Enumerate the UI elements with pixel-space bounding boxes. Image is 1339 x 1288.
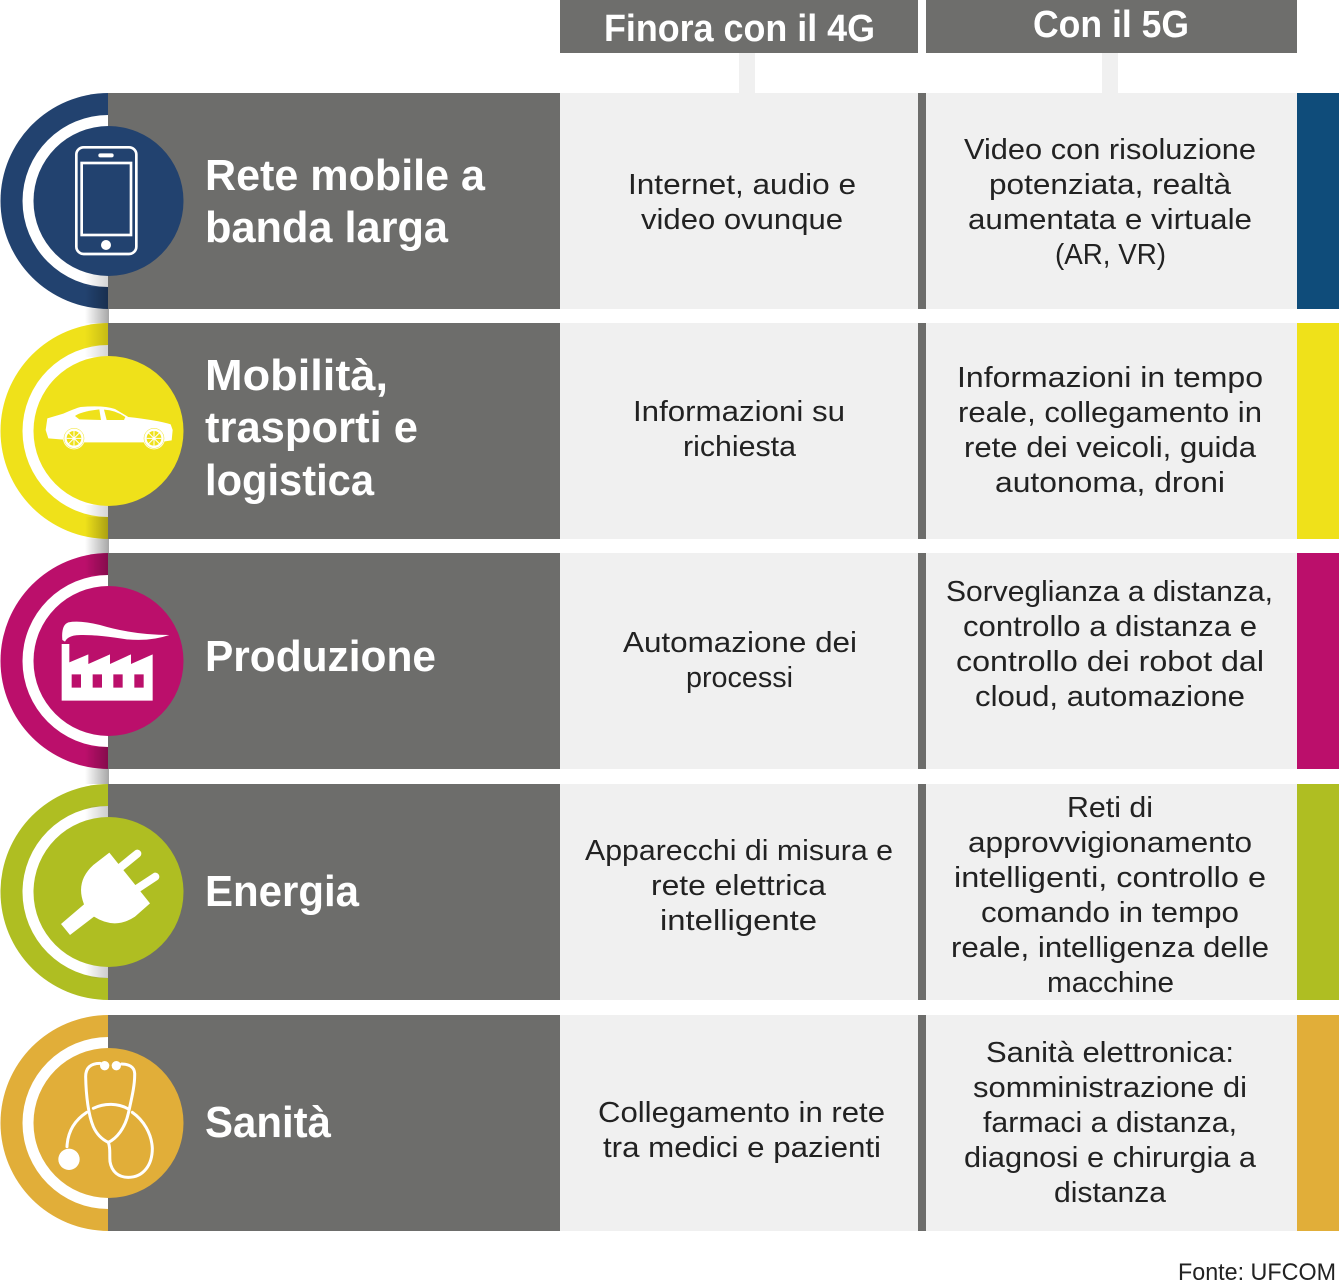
4G cell <box>560 93 918 309</box>
4G cell: tra medici e pazienti <box>603 1132 881 1164</box>
row heading panel <box>108 93 560 309</box>
row heading panel: trasporti e <box>205 403 418 452</box>
icon badge: blue ring <box>0 93 109 323</box>
colour strip <box>1297 553 1339 769</box>
icon: smartphone <box>34 126 184 276</box>
icon: plug <box>34 817 184 967</box>
5G cell: aumentata e virtuale <box>968 204 1252 236</box>
row: Energia <box>0 784 1339 1000</box>
5G cell: Informazioni in tempo <box>957 362 1263 394</box>
row heading panel: Energia <box>205 867 360 916</box>
column header: Finora con il 4G <box>560 0 918 93</box>
4G cell: Collegamento in rete <box>598 1097 885 1129</box>
5G cell: Video con risoluzione <box>964 134 1256 166</box>
row heading panel <box>108 1015 560 1231</box>
5G cell: intelligenti, controllo e <box>954 862 1266 894</box>
5G cell <box>918 93 1297 309</box>
row heading panel: Produzione <box>205 632 436 681</box>
5G cell: reale, intelligenza delle <box>951 932 1269 964</box>
4G cell: rete elettrica <box>651 870 827 902</box>
5G cell: (AR, VR) <box>1055 239 1166 271</box>
row heading panel: logistica <box>205 456 374 505</box>
row heading panel: banda larga <box>205 203 449 252</box>
4G cell <box>560 323 918 539</box>
5G cell: potenziata, realtà <box>989 169 1232 201</box>
column header: Con il 5G <box>926 0 1297 93</box>
column header: Con il 5G: Con il 5G <box>1033 4 1189 46</box>
5G cell: somministrazione di <box>973 1072 1247 1104</box>
colour strip <box>1297 1015 1339 1231</box>
5G cell: comando in tempo <box>981 897 1239 929</box>
row: Produzione <box>0 553 1339 784</box>
5G cell <box>918 1015 1297 1231</box>
source note: Fonte: UFCOM <box>1178 1259 1336 1286</box>
5G cell <box>918 323 1297 539</box>
5G cell: approvvigionamento <box>968 827 1252 859</box>
5G cell: controllo dei robot dal <box>956 646 1264 678</box>
row heading panel <box>108 784 560 1000</box>
icon: car <box>34 356 184 506</box>
row heading panel <box>108 553 560 769</box>
5G cell: distanza <box>1054 1177 1167 1209</box>
icon badge: green ring <box>0 784 109 1000</box>
4G cell: Apparecchi di misura e <box>585 835 893 867</box>
colour strip <box>1297 784 1339 1000</box>
icon badge: gold ring <box>0 1015 108 1231</box>
5G cell: Reti di <box>1067 792 1153 824</box>
4G cell <box>560 784 918 1000</box>
5G cell: autonoma, droni <box>995 467 1225 499</box>
row heading panel <box>108 323 560 539</box>
column header: Finora con il 4G: Finora con il 4G <box>604 8 875 50</box>
row: Sanità <box>0 1015 1339 1231</box>
4G cell: Automazione dei <box>623 627 857 659</box>
5G cell <box>918 784 1297 1000</box>
4G cell <box>560 553 918 769</box>
4G cell: richiesta <box>683 431 797 463</box>
icon badge: yellow ring <box>0 323 109 553</box>
row: Mobilità, trasporti e logistica <box>0 323 1339 553</box>
5G cell: macchine <box>1047 967 1174 999</box>
5G cell: farmaci a distanza, <box>983 1107 1237 1139</box>
4G cell: processi <box>686 662 793 694</box>
icon: stethoscope <box>34 1048 184 1198</box>
row heading panel: Sanità <box>205 1098 332 1147</box>
4G cell: Informazioni su <box>633 396 845 428</box>
4G cell: Internet, audio e <box>628 169 856 201</box>
4G cell: video ovunque <box>641 204 843 236</box>
5G cell: diagnosi e chirurgia a <box>964 1142 1257 1174</box>
5G cell: controllo a distanza e <box>963 611 1257 643</box>
5G cell: rete dei veicoli, guida <box>964 432 1257 464</box>
4G cell: intelligente <box>660 905 817 937</box>
4G cell <box>560 1015 918 1231</box>
colour strip <box>1297 93 1339 309</box>
icon badge: magenta ring <box>0 553 109 784</box>
5G cell: Sanità elettronica: <box>986 1037 1234 1069</box>
5G cell: cloud, automazione <box>975 681 1245 713</box>
row: Rete mobile a banda larga <box>0 93 1339 323</box>
icon: factory <box>34 586 184 736</box>
row heading panel: Rete mobile a <box>205 151 486 200</box>
5G cell <box>918 553 1297 769</box>
row heading panel: Mobilità, <box>205 351 388 400</box>
5G cell: Sorveglianza a distanza, <box>946 576 1273 608</box>
5G cell: reale, collegamento in <box>958 397 1262 429</box>
colour strip <box>1297 323 1339 539</box>
